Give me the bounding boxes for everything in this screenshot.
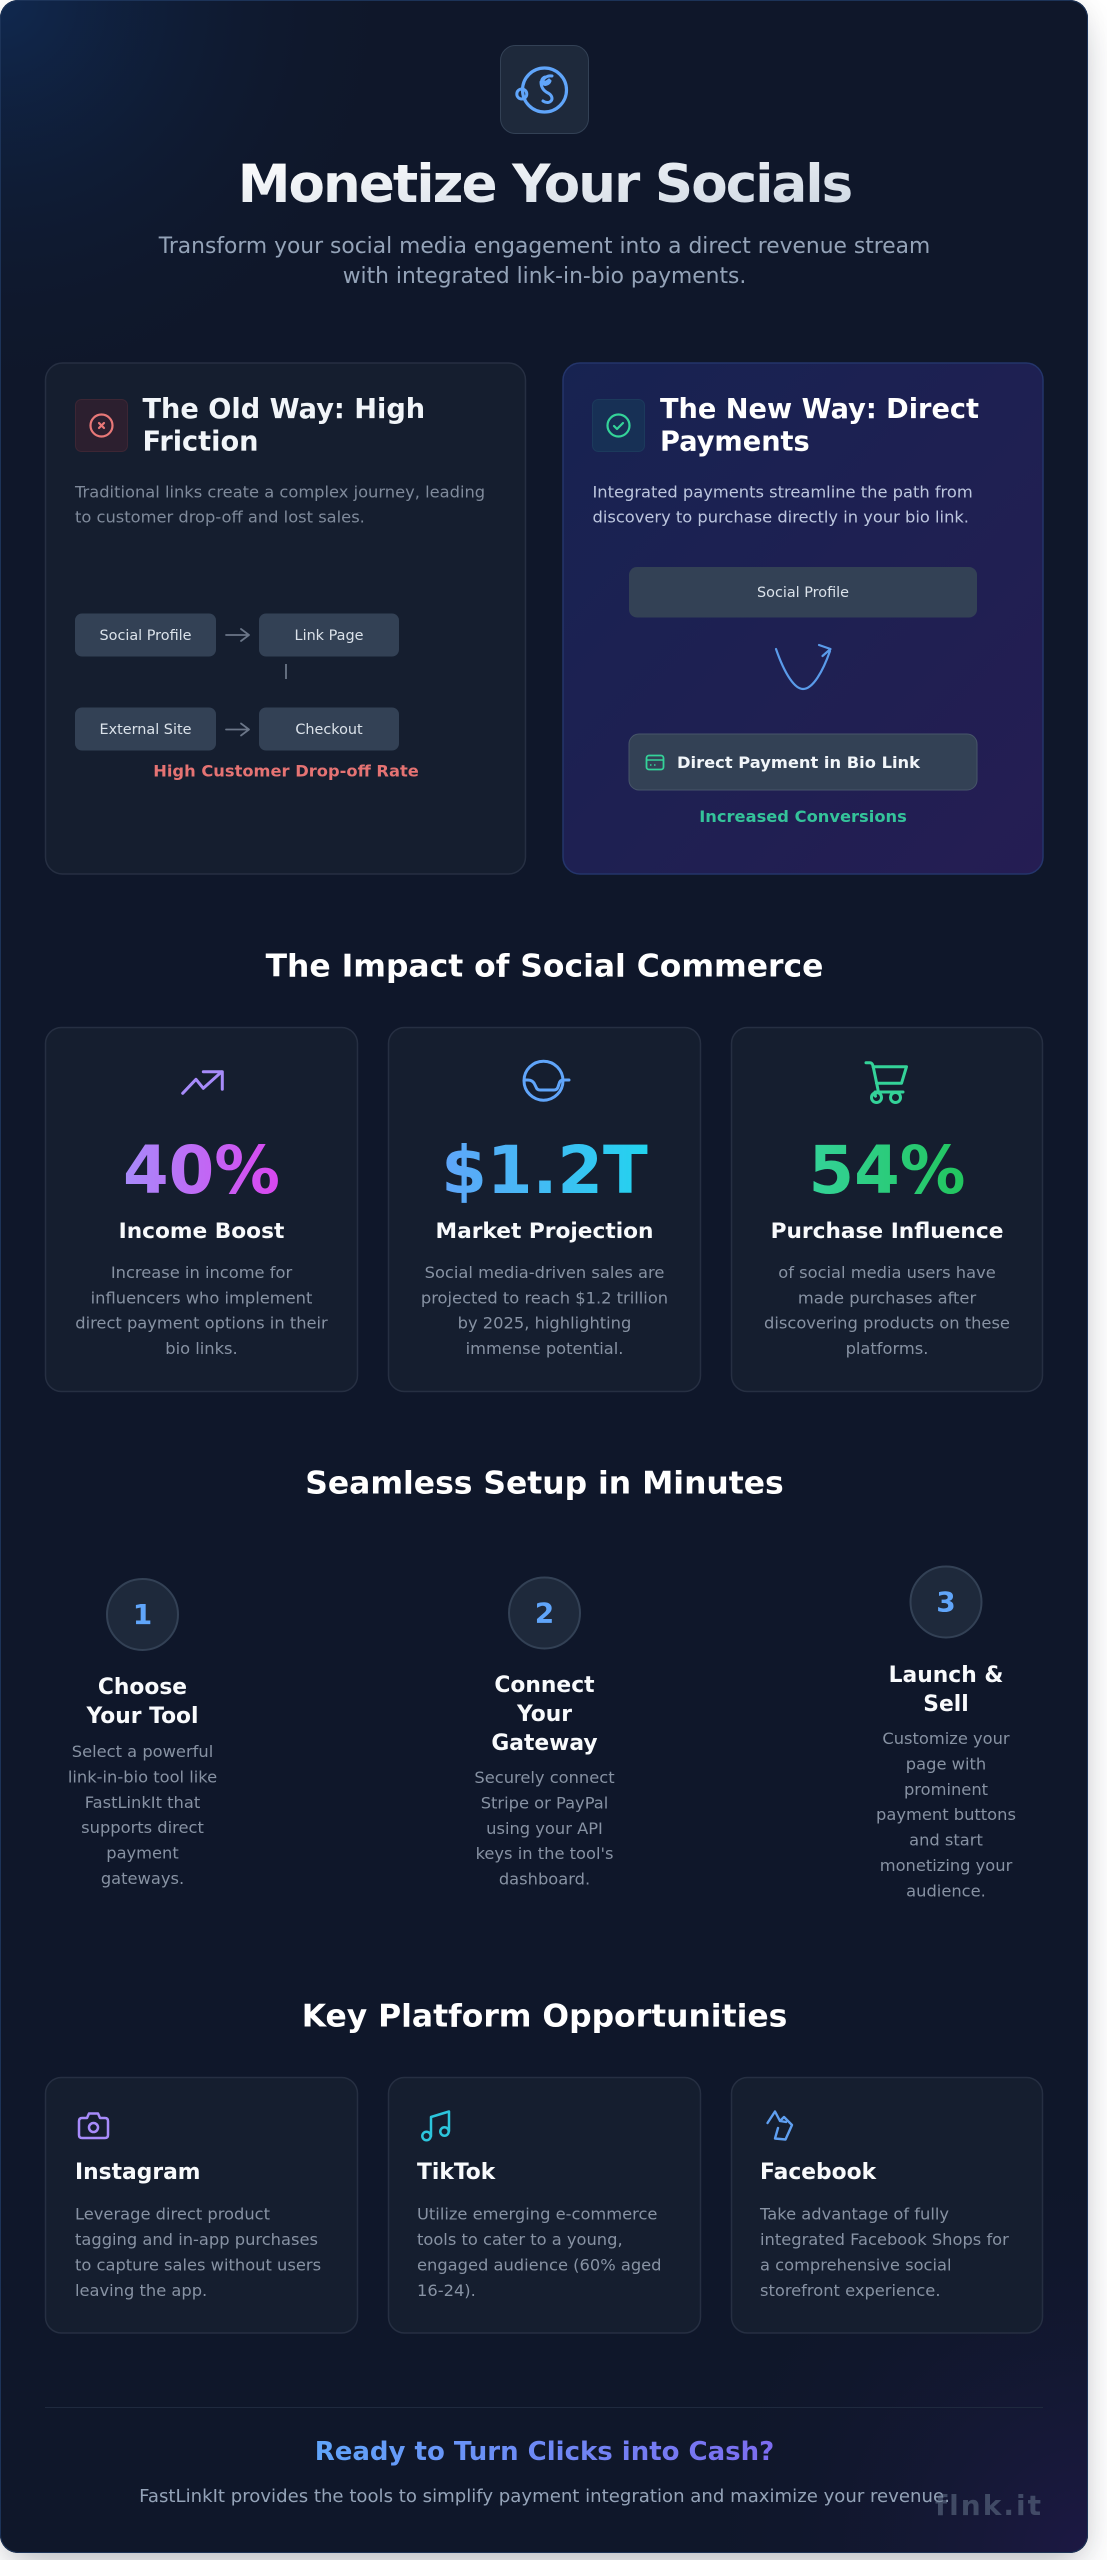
- step 2: [474, 1578, 615, 1889]
- step number: 3: [936, 1586, 956, 1618]
- stat card: income boost: [46, 1028, 358, 1392]
- node: direct payment: Direct Payment in Bio Link: [677, 753, 921, 772]
- node: external site: External Site: [100, 722, 192, 738]
- description: old way: to customer drop-off and lost sales.: [75, 508, 365, 526]
- stat description: direct payment options in their: [75, 1314, 328, 1333]
- heading: platforms: Key Platform Opportunities: [302, 1998, 787, 2034]
- step description: supports direct: [81, 1818, 204, 1837]
- stat label: Purchase Influence: [771, 1219, 1003, 1244]
- step description: monetizing your: [880, 1856, 1013, 1875]
- step description: gateways.: [101, 1869, 184, 1888]
- step 1: [68, 1579, 217, 1888]
- platform description: integrated Facebook Shops for: [760, 2230, 1009, 2249]
- arrow: curved: [776, 645, 830, 689]
- node: social profile: [75, 614, 216, 656]
- step description: link-in-bio tool like: [68, 1767, 217, 1786]
- description: new way: discovery to purchase directly in your bio link.: [592, 508, 969, 526]
- step description: prominent: [904, 1780, 988, 1799]
- step number: [107, 1579, 178, 1650]
- stat value: 54%: [808, 1133, 966, 1209]
- stat description: Increase in income for: [111, 1263, 292, 1282]
- node: checkout: Checkout: [295, 722, 363, 738]
- step title: Gateway: [491, 1731, 598, 1756]
- node: link page: [259, 614, 399, 656]
- heading: new way: Payments: [660, 426, 810, 458]
- heading: new way: The New Way: Direct: [660, 394, 979, 425]
- icon: x circle: [76, 400, 128, 452]
- stat value: 40%: [123, 1133, 280, 1209]
- callout: conversions: Increased Conversions: [699, 807, 907, 826]
- arrow: [226, 629, 249, 641]
- platform description: Leverage direct product: [75, 2204, 270, 2224]
- subtitle: with integrated link-in-bio payments.: [343, 264, 746, 289]
- node: checkout: [259, 708, 399, 750]
- platform description: tagging and in-app purchases: [75, 2230, 318, 2249]
- platform description: tools to cater to a young,: [417, 2230, 623, 2249]
- step description: Customize your: [882, 1729, 1010, 1748]
- stat description: by 2025, highlighting: [458, 1314, 631, 1333]
- footer call to action: [139, 2437, 950, 2507]
- node: social profile: Social Profile: [757, 585, 849, 601]
- platform description: Utilize emerging e-commerce: [417, 2204, 657, 2224]
- callout: drop-off: High Customer Drop-off Rate: [153, 762, 419, 780]
- stat label: Income Boost: [119, 1219, 284, 1244]
- icon: trending up: [183, 1072, 222, 1093]
- header: [158, 46, 930, 289]
- heading: setup: Seamless Setup in Minutes: [305, 1466, 784, 1502]
- flow diagram: high friction: [75, 614, 399, 750]
- stat description: projected to reach $1.2 trillion: [421, 1288, 668, 1307]
- stat description: platforms.: [846, 1339, 928, 1358]
- node: social profile: [629, 567, 977, 618]
- stat label: Market Projection: [435, 1219, 654, 1244]
- arrow: [226, 724, 249, 736]
- heading: old way: Friction: [142, 426, 259, 458]
- platform card: instagram: [46, 2078, 358, 2333]
- step description: Securely connect: [474, 1768, 615, 1787]
- step title: Choose: [98, 1675, 187, 1700]
- cta text: FastLinkIt provides the tools to simplify payment integration and maximize your revenue.: [139, 2486, 950, 2507]
- platform card: tiktok: [388, 2078, 700, 2333]
- platform description: to capture sales without users: [75, 2255, 321, 2274]
- step description: Select a powerful: [72, 1742, 213, 1761]
- title: Monetize Your Socials: [238, 154, 852, 215]
- icon: credit card: [646, 756, 664, 770]
- icon: shopping cart: [866, 1063, 906, 1102]
- step description: keys in the tool's: [476, 1844, 613, 1863]
- step title: Your Tool: [85, 1704, 199, 1729]
- panel: the old way: [46, 363, 526, 874]
- stat description: bio links.: [165, 1339, 238, 1358]
- step title: Connect: [494, 1673, 595, 1698]
- step number: [509, 1578, 580, 1648]
- step description: Stripe or PayPal: [481, 1793, 608, 1812]
- icon: thumbs up: [768, 2112, 792, 2140]
- step description: audience.: [906, 1881, 986, 1900]
- platform name: Instagram: [75, 2160, 201, 2185]
- heading: impact: The Impact of Social Commerce: [266, 948, 823, 984]
- step title: Launch &: [889, 1663, 1003, 1688]
- node: external site: [75, 708, 216, 750]
- stat value: $1.2T: [441, 1133, 648, 1209]
- platform name: Facebook: [760, 2160, 877, 2185]
- platform description: leaving the app.: [75, 2281, 207, 2300]
- icon: camera: [79, 2114, 108, 2138]
- stat description: influencers who implement: [91, 1288, 312, 1307]
- step description: and start: [909, 1831, 983, 1850]
- icon: check circle: [592, 400, 644, 452]
- node: link page: Link Page: [295, 628, 364, 644]
- platform card: facebook: [732, 2078, 1042, 2333]
- connector: [285, 664, 287, 679]
- description: old way: Traditional links create a complex journey, leading: [74, 482, 485, 502]
- flow diagram: direct: [629, 567, 977, 790]
- step description: page with: [906, 1754, 986, 1773]
- panel: the new way: [563, 363, 1043, 874]
- platform description: a comprehensive social: [760, 2255, 952, 2274]
- platform description: 16-24).: [417, 2281, 476, 2300]
- stat description: of social media users have: [778, 1263, 996, 1282]
- cta heading: Ready to Turn Clicks into Cash?: [315, 2437, 774, 2467]
- stat description: immense potential.: [466, 1339, 623, 1358]
- step number: [910, 1566, 982, 1638]
- step title: Sell: [923, 1692, 969, 1717]
- platform description: storefront experience.: [760, 2281, 941, 2300]
- icon: dollar globe: [500, 46, 588, 134]
- stat description: discovering products on these: [764, 1314, 1010, 1333]
- description: new way: Integrated payments streamline the path from: [592, 482, 973, 502]
- subtitle: Transform your social media engagement into a direct revenue stream: [158, 234, 930, 259]
- icon: music note: [422, 2112, 449, 2140]
- stat card: purchase influence: [732, 1028, 1042, 1392]
- node: direct payment: [629, 734, 977, 790]
- stat description: made purchases after: [798, 1288, 976, 1307]
- icon: piggy globe: [524, 1061, 569, 1100]
- platform description: engaged audience (60% aged: [417, 2255, 662, 2274]
- platform description: Take advantage of fully: [759, 2204, 949, 2224]
- step title: Your: [516, 1702, 572, 1727]
- stat card: market projection: [388, 1028, 700, 1392]
- step number: 2: [535, 1596, 554, 1630]
- node: social profile: Social Profile: [100, 628, 192, 644]
- stat description: Social media-driven sales are: [425, 1263, 664, 1282]
- step description: dashboard.: [499, 1870, 590, 1889]
- heading: old way: The Old Way: High: [142, 394, 425, 425]
- platform name: TikTok: [417, 2160, 496, 2185]
- step description: payment buttons: [876, 1805, 1016, 1824]
- step description: FastLinkIt that: [85, 1793, 200, 1812]
- step 3: [876, 1566, 1016, 1900]
- step description: using your API: [486, 1819, 603, 1838]
- step description: payment: [106, 1844, 179, 1863]
- watermark: flnk.it: [935, 2489, 1043, 2522]
- step number: 1: [133, 1598, 152, 1631]
